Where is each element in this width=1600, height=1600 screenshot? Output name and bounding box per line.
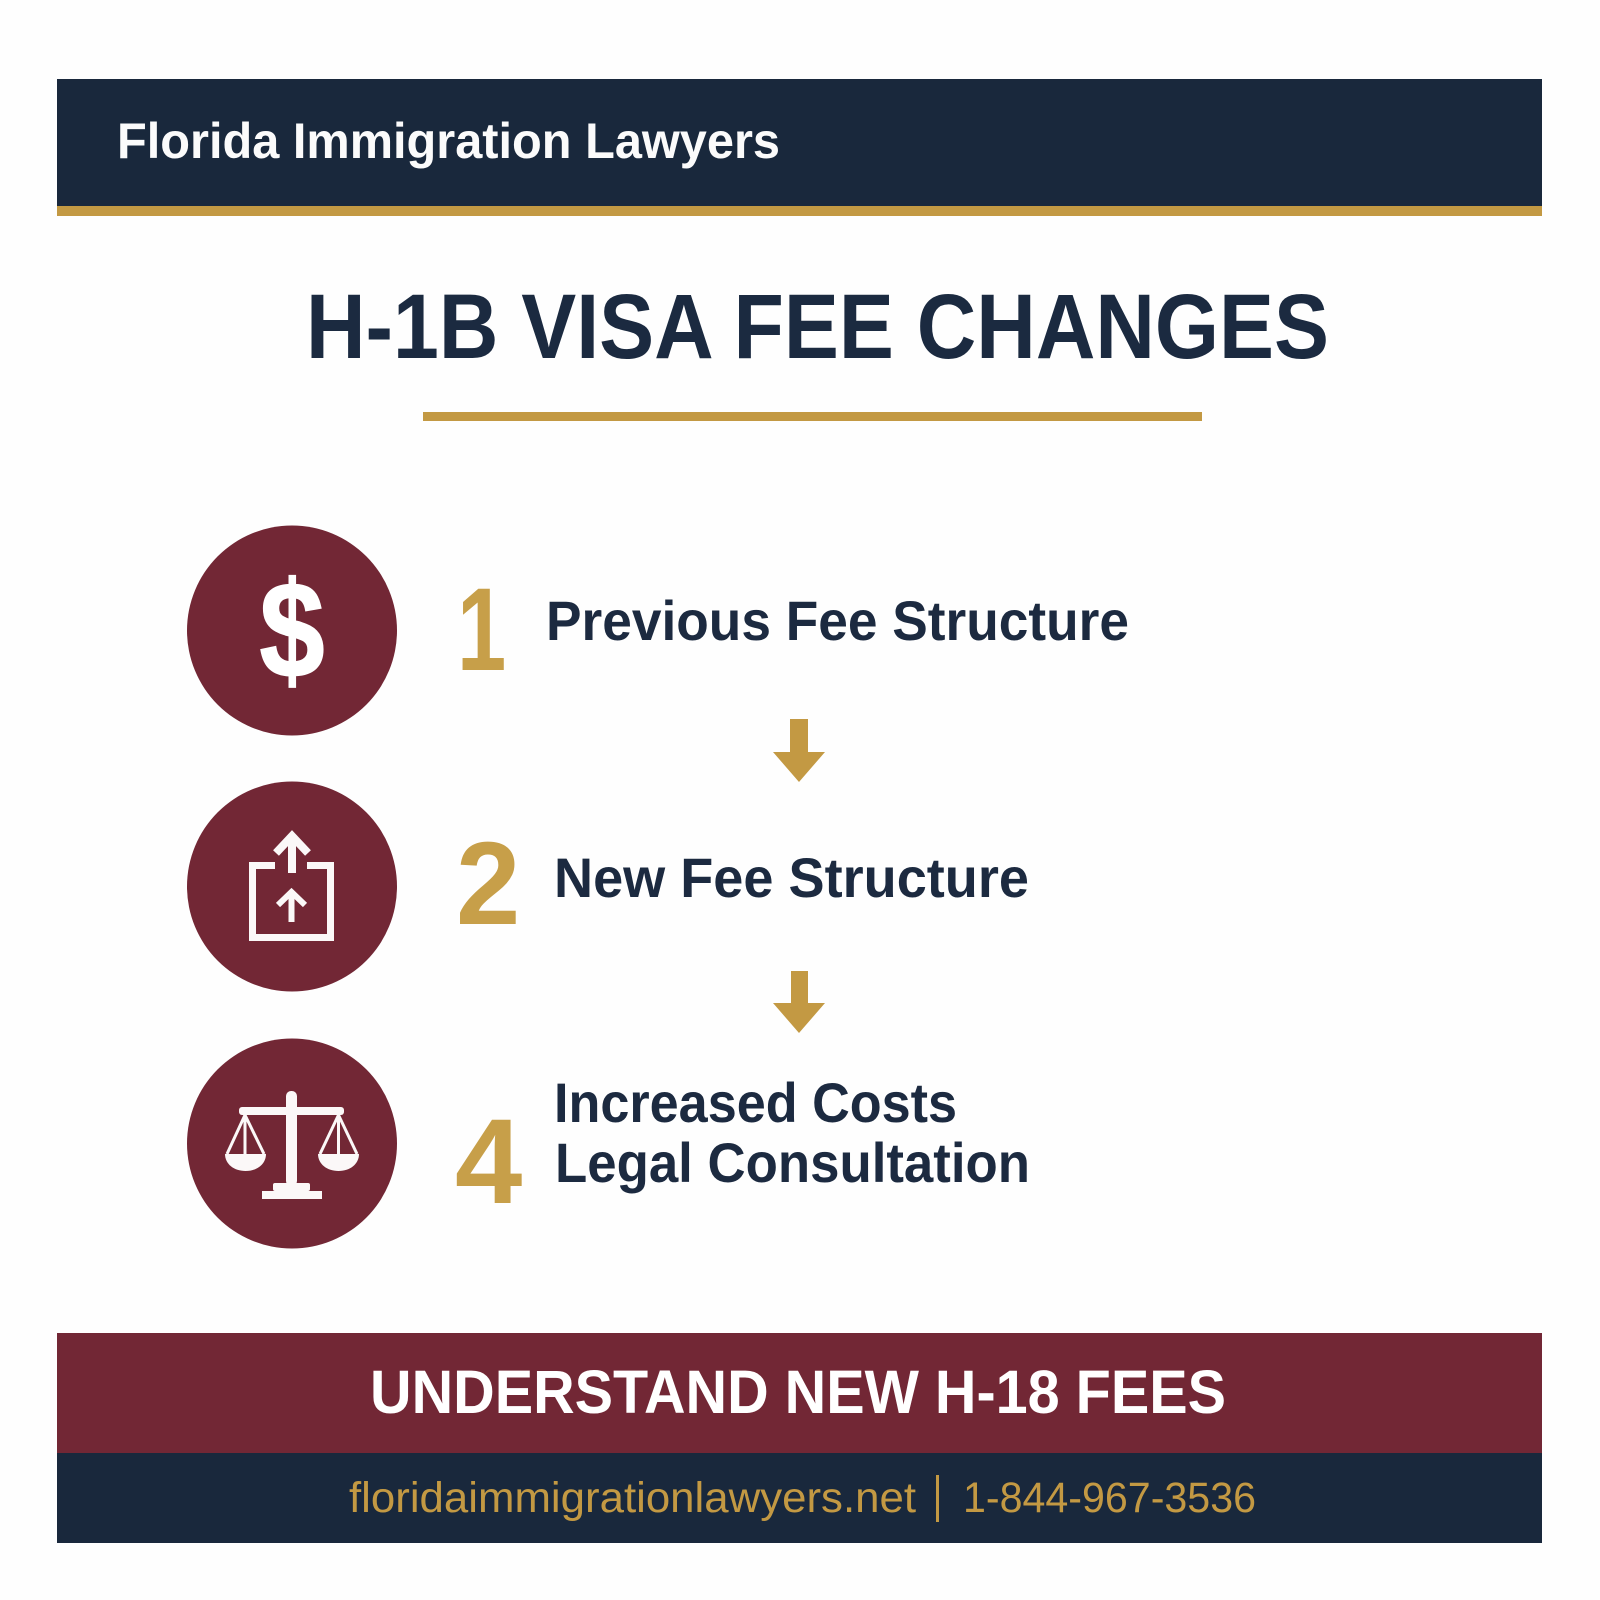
- step 2: new fee structure: [187, 782, 1029, 992]
- step 1: previous fee structure: [187, 526, 1129, 736]
- arrow: step 1 to step 2: [773, 719, 825, 782]
- call to action text: UNDERSTAND NEW H-18 FEES: [370, 1358, 1226, 1426]
- icon: dollar sign in circle: $: [259, 554, 325, 706]
- phone number: 1-844-967-3536: [963, 1474, 1256, 1522]
- label: previous fee structure: Previous Fee Structure: [546, 589, 1129, 652]
- main title: H-1B VISA FEE CHANGES: [306, 276, 1329, 378]
- number 1: 1: [457, 565, 506, 696]
- icon: scales of justice in circle: [187, 1038, 397, 1248]
- footer divider: [936, 1475, 939, 1522]
- number 2: 2: [456, 817, 520, 949]
- header brand name: Florida Immigration Lawyers: [117, 113, 780, 169]
- icon: dollar sign in circle: [187, 526, 397, 736]
- icon: upload arrows from box in circle: [187, 782, 397, 992]
- call to action band: [57, 1333, 1542, 1453]
- website address: floridaimmigrationlawyers.net: [349, 1474, 916, 1522]
- title underline: [423, 412, 1202, 421]
- arrow: step 2 to step 3: [773, 971, 825, 1033]
- step 3: increased costs and legal consultation: [187, 1038, 1030, 1248]
- footer contact band: [57, 1453, 1542, 1543]
- header banner: [57, 79, 1542, 216]
- label: legal consultation: Legal Consultation: [555, 1131, 1030, 1194]
- label: new fee structure: New Fee Structure: [554, 846, 1029, 909]
- label: increased costs: Increased Costs: [554, 1071, 957, 1134]
- number 4: 4: [455, 1093, 522, 1229]
